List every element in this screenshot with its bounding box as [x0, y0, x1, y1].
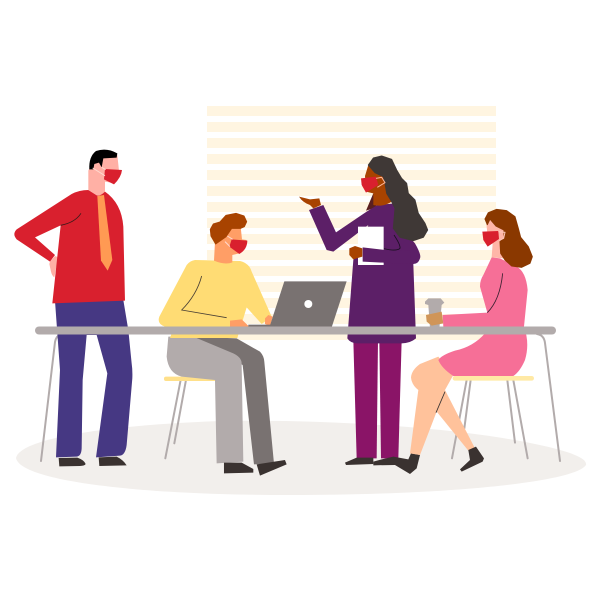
trousers and shoes [345, 340, 420, 474]
table legs [41, 334, 560, 461]
person: seated woman in pink dress [410, 209, 532, 472]
upper body [159, 213, 273, 338]
legs and shoes [167, 337, 287, 476]
chair: left [164, 377, 221, 458]
upper body [299, 156, 428, 343]
chair: right [452, 376, 534, 458]
window blinds [207, 106, 496, 340]
laptop [248, 281, 347, 327]
legs and shoes [410, 357, 484, 472]
floor shadow [16, 421, 586, 495]
upper body [14, 150, 125, 303]
person: standing woman in purple dress [299, 156, 428, 474]
person: seated man in yellow sweater [159, 213, 287, 476]
person: man in red shirt standing [14, 150, 132, 466]
trousers [55, 300, 132, 466]
upper body, cup and hand [425, 209, 532, 376]
table top [35, 326, 556, 334]
